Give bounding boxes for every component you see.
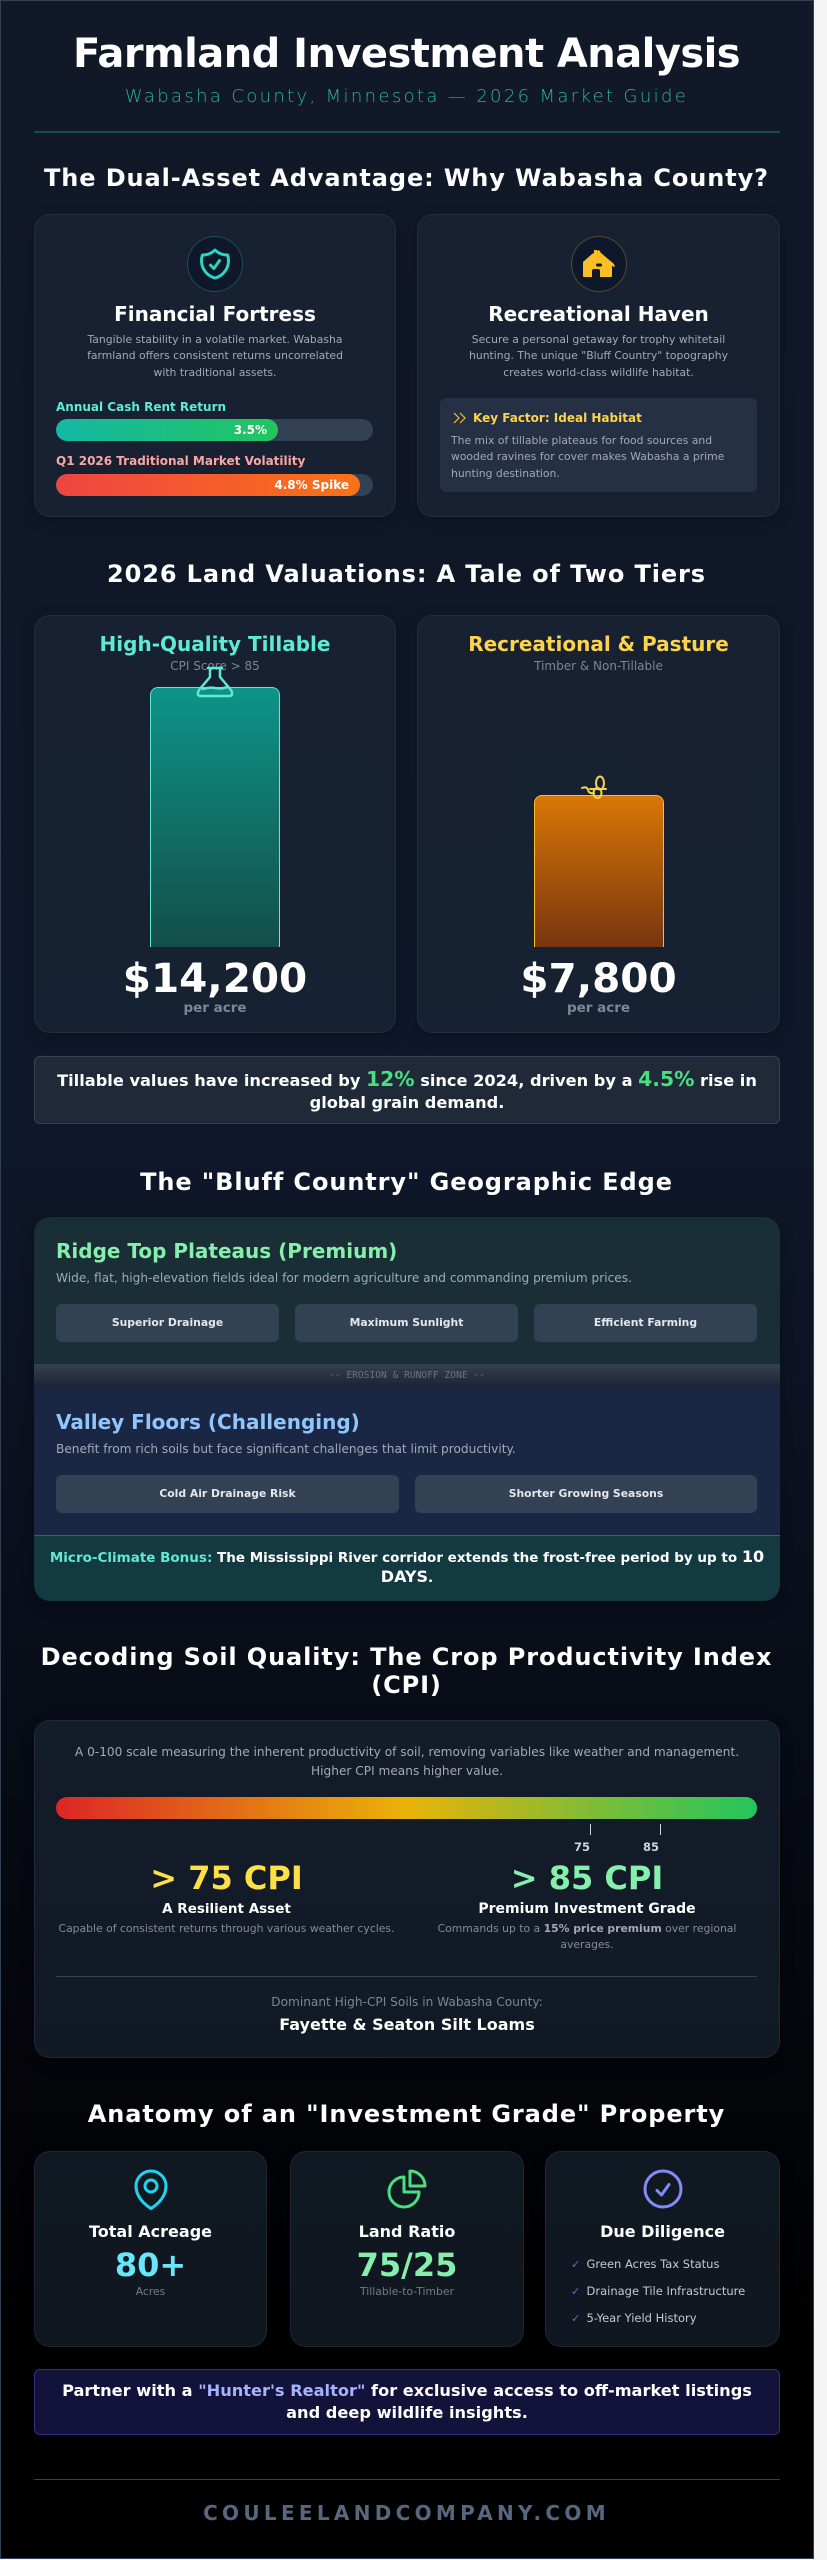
unit: Tillable-to-Timber [360, 2285, 454, 2298]
key factor text: hunting destination. [451, 467, 560, 480]
heading: decoding soil quality [41, 1643, 772, 1699]
chip: Cold Air Drainage Risk [159, 1487, 296, 1500]
callout text: Partner with a "Hunter's Realtor" for exclusive access to off-market listings [62, 2381, 752, 2400]
chip [56, 1304, 279, 1342]
zone: erosion band: -- EROSION & RUNOFF ZONE -- [329, 1370, 485, 1381]
detail: Capable of consistent returns through various weather cycles. [59, 1922, 394, 1935]
value: 75/25 [357, 2246, 457, 2284]
label: volatility: Q1 2026 Traditional Market Volatility [56, 454, 305, 468]
key factor text: wooded ravines for cover makes Wabasha a prime [451, 450, 724, 463]
chip: Superior Drainage [112, 1316, 223, 1329]
tick label: 75: 75 [574, 1840, 590, 1854]
value: $7,800 [520, 954, 677, 1002]
callout: hunter's realtor [34, 2369, 780, 2435]
tick: 75 [590, 1824, 591, 1835]
description [75, 1744, 739, 1778]
bar: recreational value [534, 795, 664, 947]
value: > 85 CPI [511, 1859, 663, 1897]
tick label: 85: 85 [643, 1840, 659, 1854]
item: ✓ [571, 2312, 580, 2325]
item: 5-Year Yield History [586, 2311, 697, 2325]
description: with traditional assets. [153, 366, 276, 379]
description [87, 333, 343, 379]
soils name: Fayette & Seaton Silt Loams [279, 2015, 535, 2034]
bonus text: DAYS. [381, 1567, 433, 1586]
description: Secure a personal getaway for trophy whitetail [472, 333, 725, 346]
panel: high-quality tillable [34, 615, 396, 1033]
chip [534, 1304, 757, 1342]
zone: erosion band [34, 1364, 780, 1388]
panel: geographic diagram [34, 1217, 780, 1601]
detail [438, 1922, 736, 1951]
subheading: CPI Score > 85 [170, 659, 260, 673]
tick: 85 [660, 1824, 661, 1835]
unit: per acre [183, 1000, 247, 1016]
callout: value growth [34, 1056, 780, 1124]
chip [415, 1475, 757, 1513]
description: A 0-100 scale measuring the inherent productivity of soil, removing variables like weather and management. [75, 1744, 739, 1758]
heading: decoding soil quality: Decoding Soil Quality: The Crop Productivity Index [41, 1643, 772, 1671]
key factor heading: Key Factor: Ideal Habitat [473, 411, 642, 425]
heading: dual-asset advantage: The Dual-Asset Advantage: Why Wabasha County? [44, 164, 769, 192]
zone: ridge top plateaus [34, 1217, 780, 1364]
icon: shield [187, 236, 243, 292]
label: cash rent: Annual Cash Rent Return [56, 400, 226, 414]
footer: website: COULEELANDCOMPANY.COM [203, 2501, 610, 2525]
description: Higher CPI means higher value. [311, 1764, 503, 1778]
icon: map pin [134, 2170, 168, 2210]
item: ✓ [571, 2258, 580, 2271]
panel: recreational and pasture [417, 615, 780, 1033]
column: premium grade [438, 1859, 736, 1951]
zone: valley floors [34, 1388, 780, 1535]
bonus text [50, 1547, 764, 1586]
name: Premium Investment Grade [478, 1901, 696, 1917]
description: creates world-class wildlife habitat. [503, 366, 694, 379]
detail: averages. [560, 1938, 614, 1951]
icon: double chevron [454, 412, 466, 424]
column: resilient asset [59, 1859, 394, 1935]
chip: Maximum Sunlight [350, 1316, 463, 1329]
panel heading: Financial Fortress [114, 302, 316, 326]
card: total acreage [34, 2151, 267, 2347]
item: Drainage Tile Infrastructure [586, 2284, 745, 2298]
bar: cash rent 3.5%: 3.5% [234, 423, 267, 437]
card: due diligence [545, 2151, 780, 2347]
callout text [62, 2381, 752, 2422]
subtitle: Wabasha County, Minnesota — 2026 Market Guide [125, 86, 688, 107]
heading: decoding soil quality: (CPI) [371, 1671, 442, 1699]
zone text: Wide, flat, high-elevation fields ideal for modern agriculture and commanding premium prices. [56, 1271, 632, 1285]
soils label: Dominant High-CPI Soils in Wabasha County: [271, 1995, 543, 2009]
description: Tangible stability in a volatile market. Wabasha [87, 333, 342, 346]
panel heading: Recreational Haven [488, 302, 709, 326]
bar: tillable value [150, 687, 280, 947]
unit: per acre [567, 1000, 630, 1016]
chip [295, 1304, 518, 1342]
panel: CPI [34, 1720, 780, 2058]
icon: pie chart [388, 2170, 426, 2208]
item: Green Acres Tax Status [586, 2257, 719, 2271]
heading: bluff country: The "Bluff Country" Geographic Edge [140, 1168, 673, 1196]
bonus text: Micro-Climate Bonus: The Mississippi River corridor extends the frost-free period by up to 10 [50, 1547, 764, 1566]
card heading: Total Acreage [89, 2222, 212, 2241]
callout text: Tillable values have increased by 12% since 2024, driven by a 4.5% rise in [57, 1067, 757, 1091]
zone text: Benefit from rich soils but face significant challenges that limit productivity. [56, 1442, 516, 1456]
value: 80+ [115, 2246, 186, 2284]
icon: flask [196, 666, 234, 698]
description: hunting. The unique "Bluff Country" topography [469, 349, 728, 362]
value: > 75 CPI [150, 1859, 303, 1897]
description: farmland offers consistent returns uncorrelated [87, 349, 343, 362]
callout text: and deep wildlife insights. [286, 2403, 528, 2422]
card heading: Due Diligence [600, 2222, 725, 2241]
description [469, 333, 728, 379]
icon: house [571, 236, 627, 292]
icon: check circle [644, 2170, 682, 2208]
detail: Commands up to a 15% price premium over regional [438, 1922, 736, 1935]
title: Farmland Investment Analysis [73, 31, 740, 77]
panel heading: High-Quality Tillable [100, 632, 330, 656]
subheading: Timber & Non-Tillable [534, 659, 663, 673]
value: $14,200 [123, 954, 307, 1002]
zone heading: Valley Floors (Challenging) [56, 1410, 360, 1434]
name: A Resilient Asset [162, 1901, 291, 1917]
item: ✓ [571, 2285, 580, 2298]
key factor text: The mix of tillable plateaus for food sources and [451, 434, 712, 447]
callout: key factor [440, 398, 757, 492]
chip: Efficient Farming [594, 1316, 697, 1329]
bar: cash rent 3.5% [56, 419, 373, 441]
chip: Shorter Growing Seasons [509, 1487, 663, 1500]
panel: financial fortress [34, 214, 396, 517]
card heading: Land Ratio [359, 2222, 455, 2241]
key factor text [450, 434, 724, 480]
panel heading: Recreational & Pasture [468, 632, 729, 656]
bonus strip [34, 1535, 780, 1601]
heading: land valuations: 2026 Land Valuations: A Tale of Two Tiers [107, 560, 706, 588]
chip [56, 1475, 399, 1513]
zone heading: Ridge Top Plateaus (Premium) [56, 1239, 397, 1263]
bar: volatility 4.8%: 4.8% Spike [274, 478, 349, 492]
unit: Acres [136, 2285, 165, 2298]
checklist [571, 2257, 745, 2325]
callout text [57, 1067, 757, 1112]
panel: recreational haven [417, 214, 780, 517]
card: land ratio [290, 2151, 524, 2347]
callout text: global grain demand. [310, 1093, 504, 1112]
heading: anatomy: Anatomy of an "Investment Grade" Property [88, 2100, 725, 2128]
gradient scale [56, 1797, 757, 1819]
bar: volatility 4.8% [56, 474, 373, 496]
icon: dollar [581, 776, 607, 799]
